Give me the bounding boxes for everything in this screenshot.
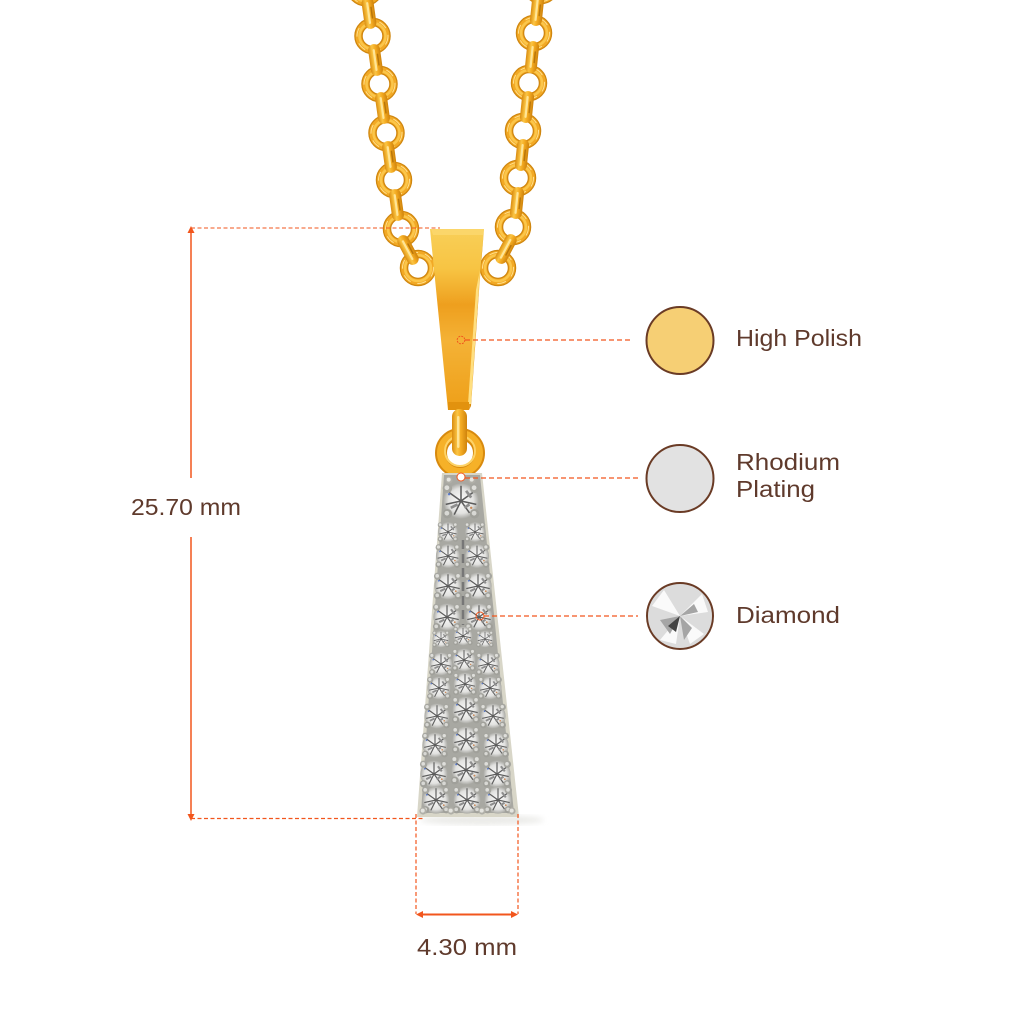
central groove [462, 540, 464, 625]
swatch: rhodium plating [646, 445, 714, 512]
lower triple diamonds [420, 648, 512, 814]
label: rhodium plating [736, 449, 840, 502]
leader: rhodium plating [457, 473, 638, 481]
jump ring and connector [441, 409, 479, 472]
label: diamond: Diamond [736, 602, 840, 628]
leader: diamond [476, 612, 638, 620]
label: rhodium plating: Rhodium [736, 449, 840, 475]
height dimension line [188, 226, 440, 821]
pendant bail [430, 229, 484, 410]
prong beads [419, 476, 516, 815]
height label: 25.70 mm [131, 494, 241, 520]
leader: high polish [457, 336, 630, 344]
chain: left strand [350, 0, 434, 284]
chain: right strand [482, 0, 556, 284]
width dimension line [416, 814, 518, 918]
label: high polish: High Polish [736, 325, 862, 351]
swatch: diamond [647, 583, 713, 649]
width label: 4.30 mm [417, 934, 517, 960]
upper paired diamonds [432, 522, 494, 647]
pendant body with pave diamonds [417, 473, 544, 825]
top single diamond [443, 483, 479, 519]
label: rhodium plating: Plating [736, 476, 815, 502]
swatch: high polish [646, 307, 714, 374]
